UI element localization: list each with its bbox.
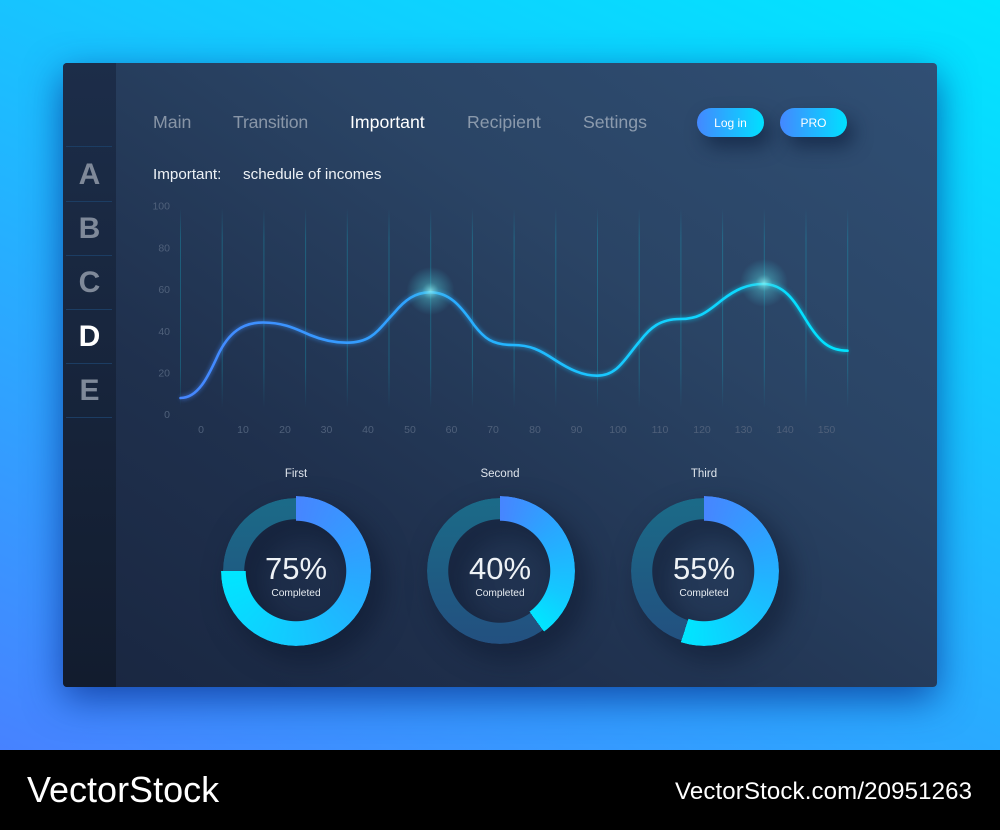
curve glow — [180, 284, 848, 398]
donut chart: Third 55% — [631, 468, 796, 664]
x axis labels: 130 — [735, 424, 752, 436]
donut chart: First 75% — [221, 468, 384, 658]
line chart: schedule of incomes — [152, 200, 850, 436]
donut rings — [631, 496, 796, 664]
y axis labels: 0 — [164, 409, 170, 421]
donut title: Third — [691, 468, 717, 480]
donut chart: Second 40% — [427, 468, 590, 659]
top navigation menu — [153, 112, 647, 132]
nav item Recipient: Recipient — [467, 112, 541, 132]
x axis labels: 110 — [652, 424, 669, 436]
x axis labels: 90 — [571, 424, 582, 436]
y axis labels: 60 — [158, 284, 170, 296]
panel: sidebar navigation — [63, 63, 116, 687]
donut rings — [427, 496, 590, 659]
x axis labels: 80 — [529, 424, 541, 436]
x axis labels: 40 — [362, 424, 374, 436]
sidebar letter A: A — [79, 158, 100, 191]
x axis labels: 20 — [279, 424, 291, 436]
footer watermark bar — [0, 750, 1000, 830]
x axis labels: 100 — [609, 424, 627, 436]
x axis labels: 120 — [693, 424, 711, 436]
nav item Settings: Settings — [583, 112, 647, 132]
y axis labels: 20 — [158, 368, 170, 380]
button: PRO — [780, 108, 847, 137]
glow at first peak — [406, 267, 454, 315]
button: PRO: PRO — [800, 116, 826, 130]
donut caption: Completed — [475, 588, 525, 599]
panel: dashboard card — [63, 63, 937, 687]
x axis labels: 70 — [487, 424, 499, 436]
chart heading title: schedule of incomes — [243, 166, 381, 183]
x axis labels: 10 — [237, 424, 249, 436]
sidebar letter B: B — [79, 212, 100, 245]
x axis labels: 140 — [776, 424, 794, 436]
donut percentage: 55% — [673, 551, 735, 586]
x axis labels: 30 — [321, 424, 332, 436]
chart heading label: Important: — [153, 166, 221, 183]
donut percentage: 75% — [265, 551, 327, 586]
nav item Important active: Important — [350, 112, 425, 132]
x axis labels: 50 — [404, 424, 416, 436]
y axis labels: 100 — [152, 200, 170, 212]
donut title: Second — [480, 468, 520, 480]
income curve — [180, 284, 848, 398]
button: Log in: Log in — [714, 116, 747, 130]
nav item Main: Main — [153, 112, 191, 132]
sidebar letter E: E — [79, 374, 100, 407]
sidebar letter D active: D — [79, 320, 100, 353]
x axis labels: 150 — [818, 424, 835, 436]
nav item Transition: Transition — [233, 112, 308, 132]
vertical grid lines — [180, 208, 848, 408]
x axis labels — [198, 424, 835, 436]
x axis labels: 60 — [446, 424, 457, 436]
button: Log in — [697, 108, 764, 137]
y axis labels — [152, 200, 170, 421]
donut rings — [221, 496, 384, 658]
footer image id: VectorStock.com/20951263 — [675, 778, 972, 805]
donut percentage: 40% — [469, 551, 531, 586]
sidebar letter C: C — [79, 266, 100, 299]
donut caption: Completed — [271, 588, 321, 599]
x axis labels: 0 — [198, 424, 204, 436]
y axis labels: 40 — [158, 326, 170, 338]
footer brand: VectorStock — [27, 769, 219, 810]
glow at second peak — [740, 259, 788, 307]
donut caption: Completed — [679, 588, 729, 599]
y axis labels: 80 — [158, 242, 170, 254]
donut title: First — [285, 468, 307, 480]
